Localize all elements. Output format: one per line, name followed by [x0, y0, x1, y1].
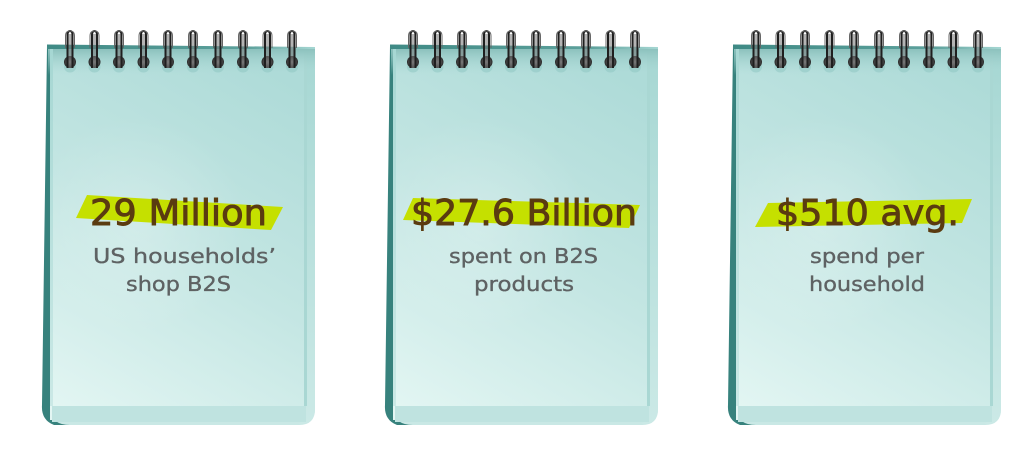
spiral binding	[750, 31, 984, 72]
notebook body	[42, 44, 315, 425]
panel: notebook $27.6 Billion	[385, 31, 658, 425]
caption line 2: products	[474, 272, 574, 296]
caption: US households' shop B2S: US households’	[93, 244, 276, 268]
stat: 29 Million: 29 Million	[90, 193, 267, 234]
caption: spend per: spend per	[810, 244, 925, 268]
highlight swatch	[755, 199, 972, 227]
panel: notebook 29 Million	[42, 31, 315, 425]
highlight swatch	[76, 195, 283, 230]
notebook body	[385, 44, 658, 425]
caption: spent on B2S: spent on B2S	[449, 244, 598, 268]
caption line 2: household	[809, 272, 925, 296]
notebook body	[728, 44, 1001, 425]
caption line 2: shop B2S	[126, 272, 231, 296]
panel: notebook $510 avg.	[728, 31, 1001, 425]
stat: $27.6 Billion: $27.6 Billion	[411, 193, 637, 234]
highlight swatch	[403, 198, 640, 228]
stat: $510 avg.: $510 avg.	[776, 193, 959, 234]
spiral binding	[64, 31, 298, 72]
spiral binding	[407, 31, 641, 72]
